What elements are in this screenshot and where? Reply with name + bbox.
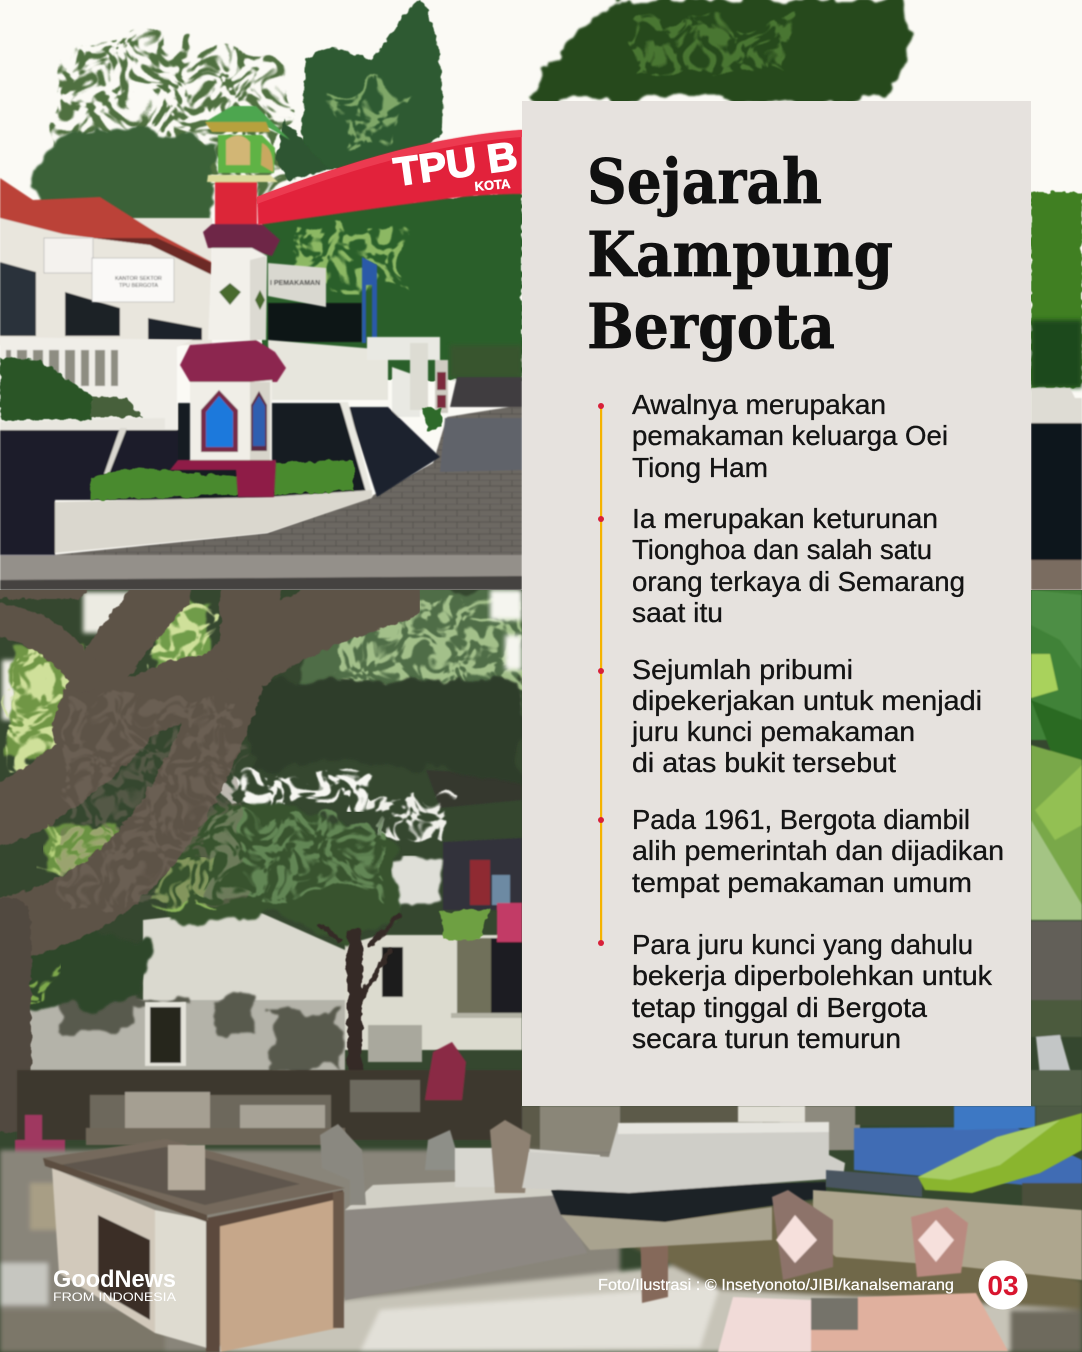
text block: point 4 <box>632 804 1004 898</box>
title: Sejarah <box>587 145 822 218</box>
wall stains <box>60 995 340 1070</box>
logo: GoodNews from Indonesia: GoodNews <box>53 1266 176 1293</box>
text block: point 5: secara turun temurun <box>632 1023 901 1054</box>
photo credit: Foto/Ilustrasi : © Insetyonoto/JIBI/kanalsemarang <box>598 1277 954 1294</box>
gravel grave <box>345 1181 556 1300</box>
blue tomb <box>826 1106 1082 1210</box>
page number badge <box>978 1260 1028 1310</box>
text block: point 3: Sejumlah pribumi <box>632 654 853 685</box>
title: Kampung <box>587 218 893 291</box>
concrete wall <box>813 1190 1082 1280</box>
text block: point 5: Para juru kunci yang dahulu <box>632 929 973 960</box>
ground <box>0 1150 1082 1352</box>
timeline <box>598 403 604 946</box>
pink diamond headstones <box>772 1190 968 1280</box>
red arch with TPU Bergota lettering <box>257 130 522 225</box>
headstones <box>320 1120 668 1303</box>
text block: point 1: Awalnya merupakan <box>632 389 886 420</box>
banana leaves on the right edge <box>918 590 1082 1193</box>
paved road <box>0 377 522 590</box>
text block: point 3: juru kunci pemakaman <box>631 716 915 747</box>
photo: graves and house beneath the trees <box>0 590 1082 1352</box>
distant graveyard <box>14 1041 953 1153</box>
text block: point 1 <box>632 389 948 483</box>
page number badge: 03 <box>987 1270 1019 1301</box>
title: Bergota <box>587 290 835 363</box>
bark texture <box>60 700 240 900</box>
photo: Bergota cemetery gate <box>0 0 1082 590</box>
text block: point 3: di atas bukit tersebut <box>632 747 896 778</box>
text block: point 2 <box>632 503 965 628</box>
text block: point 4: Pada 1961, Bergota diambil <box>632 804 970 835</box>
sky and bright leaves through the canopy <box>2 590 522 872</box>
text block: point 5: bekerja diperbolehkan untuk <box>632 960 993 991</box>
panel: text card <box>522 101 1031 1106</box>
logo: GoodNews from Indonesia: FROM INDONESIA <box>53 1290 176 1304</box>
office signboards: TPU BERGOTA <box>119 283 158 289</box>
old house window <box>145 1002 186 1066</box>
tree canopy <box>25 680 522 1010</box>
text block: point 4: tempat pemakaman umum <box>632 867 972 898</box>
shrubs <box>0 357 442 500</box>
blue signpost <box>362 257 377 343</box>
red arch with TPU Bergota lettering: KOTA <box>474 176 512 194</box>
wooden box frame <box>43 1139 345 1352</box>
text block: point 2: Ia merupakan keturunan <box>632 503 938 534</box>
office signboards: I PEMAKAMAN <box>270 280 320 287</box>
text block: point 2: saat itu <box>632 597 723 628</box>
text block: point 4: alih pemerintah dan dijadikan <box>632 835 1004 866</box>
text block: point 1: pemakaman keluarga Oei <box>632 420 948 451</box>
title <box>587 145 893 363</box>
text block: point 5: tetap tinggal di Bergota <box>632 992 927 1023</box>
house walls and windows <box>17 770 522 1080</box>
right edge of the photo <box>1031 388 1082 590</box>
text block: point 3: dipekerjakan untuk menjadi <box>632 685 982 716</box>
office signboards: KANTOR SEKTOR <box>115 276 162 282</box>
pink tiled grave <box>718 1293 1008 1352</box>
text block: point 3 <box>631 654 982 778</box>
trees behind the gate <box>28 0 1082 388</box>
text block: point 2: orang terkaya di Semarang <box>632 566 965 597</box>
white tomb with black tiles <box>522 1106 845 1250</box>
gate pillar <box>170 106 290 497</box>
text block: point 1: Tiong Ham <box>632 452 768 483</box>
text block: point 2: Tionghoa dan salah satu <box>632 534 932 565</box>
text block: point 5 <box>632 929 993 1054</box>
red arch with TPU Bergota lettering: TPU B <box>391 134 520 195</box>
building with red tiled roof <box>0 178 212 345</box>
white walls and black stone base <box>0 337 448 555</box>
office signboards <box>44 238 326 307</box>
tree trunks and branches <box>0 590 400 1110</box>
